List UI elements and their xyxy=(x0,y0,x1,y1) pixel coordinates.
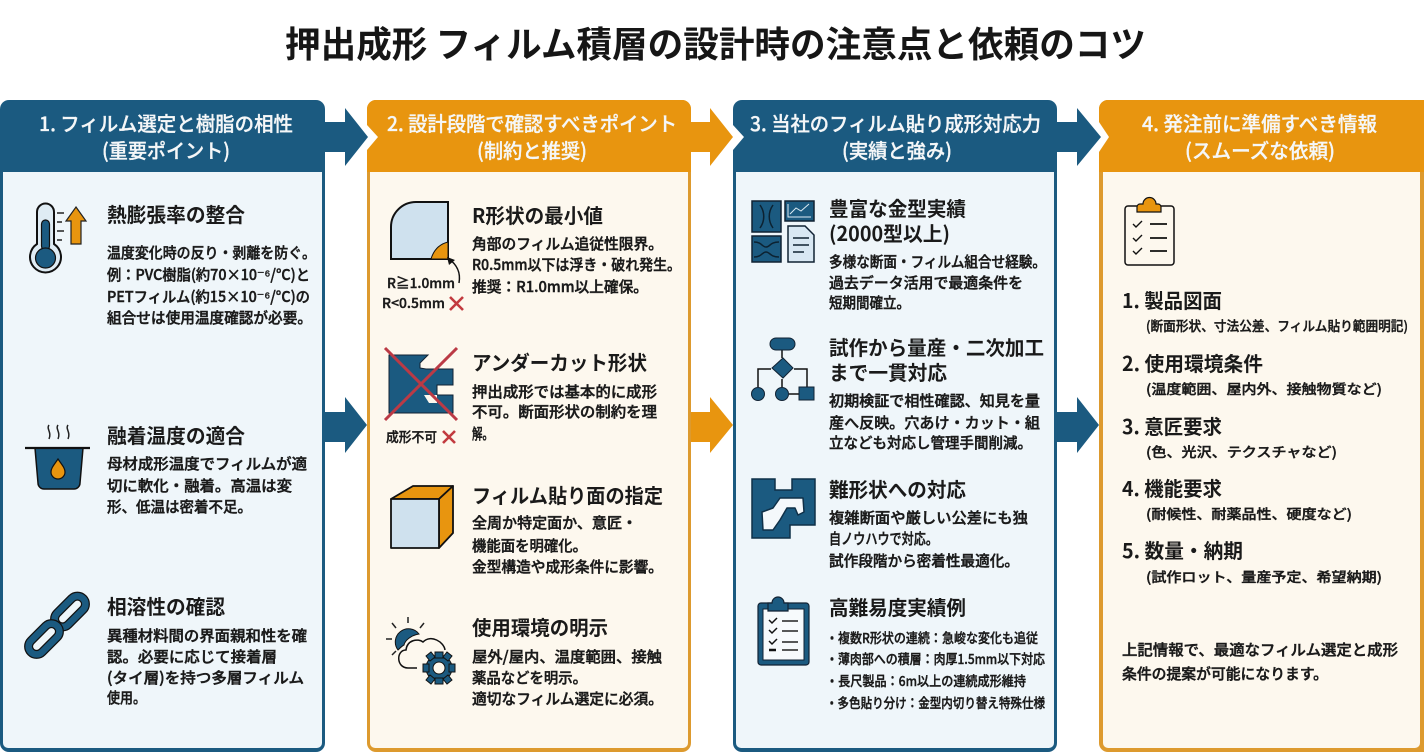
closing note: 条件の提案が可能になります。 xyxy=(1122,663,1328,684)
header: panel 2 xyxy=(387,108,677,164)
header: panel 2: (制約と推奨) xyxy=(477,135,587,164)
item: difficult shapes xyxy=(829,474,1028,571)
header: panel 3: 3. 当社のフィルム貼り成形対応力 xyxy=(750,108,1041,137)
item: 2 usage conditions xyxy=(1122,348,1382,398)
item: film surface: フィルム貼り面の指定 xyxy=(472,480,663,509)
item: film surface: 全周か特定面か、意匠・ xyxy=(472,512,637,533)
icon: thermometer with up arrow xyxy=(30,204,86,272)
item: usage environment: 適切なフィルム選定に必須。 xyxy=(472,688,663,709)
item: compatibility: 相溶性の確認 xyxy=(107,591,225,620)
item: difficult shapes: 自ノウハウで対応。 xyxy=(829,528,938,549)
icon: R corner shape xyxy=(382,202,463,312)
item: difficult shapes: 試作段階から密着性最適化。 xyxy=(829,550,1019,571)
item: difficult examples: ・多色貼り分け：金型内切り替え特殊仕様 xyxy=(826,692,1045,712)
item: compatibility: 異種材料間の界面親和性を確 xyxy=(107,625,307,646)
arrow: panel 2 to 3 top xyxy=(691,108,744,166)
panel: 3 company capability xyxy=(733,100,1057,752)
item: 4 functional requirements: (耐候性、耐薬品性、硬度など) xyxy=(1146,503,1352,523)
icon: undercut crossed out xyxy=(385,348,457,446)
header: panel 1 xyxy=(39,108,293,164)
icon: undercut crossed out: 成形不可 xyxy=(386,426,437,446)
item: usage environment xyxy=(472,612,663,709)
icon: R corner shape: R≧1.0mm xyxy=(387,272,455,292)
item: 5 quantity and delivery: (試作ロット、量産予定、希望納期) xyxy=(1146,566,1382,586)
arrow: panel 1 to 2 top xyxy=(325,108,378,166)
item: undercut: 解。 xyxy=(472,423,493,444)
panel: 2 design checkpoints xyxy=(367,100,691,752)
item: minimum R: 角部のフィルム追従性限界。 xyxy=(472,233,663,254)
item: 3 design requirements xyxy=(1122,411,1337,461)
item: fusion temperature xyxy=(107,420,307,517)
item: mold record: 豊富な金型実績 xyxy=(829,193,966,222)
item: difficult examples: ・薄肉部への積層：肉厚1.5mm以下対応 xyxy=(826,648,1045,668)
item: mold record: 多様な断面・フィルム組合せ経験。 xyxy=(829,251,1046,272)
item: compatibility: (タイ層)を持つ多層フィルム xyxy=(107,667,304,688)
item: usage environment: 薬品などを明示。 xyxy=(472,667,587,688)
item: difficult examples: ・複数R形状の連続：急峻な変化も追従 xyxy=(826,627,1038,647)
item: prototype to production: 試作から量産・二次加工 xyxy=(829,332,1044,361)
item: mold record: 過去データ活用で最適条件を xyxy=(829,272,1023,293)
title: 押出成形 フィルム積層の設計時の注意点と依頼のコツ xyxy=(285,16,1146,68)
panel: 1 film selection xyxy=(0,100,325,752)
item: prototype to production: 立なども対応し管理手間削減。 xyxy=(829,432,1032,453)
arrow: panel 3 to 4 top xyxy=(1057,108,1109,166)
panel: 4 information to prepare xyxy=(1099,100,1424,752)
item: thermal expansion: 熱膨張率の整合 xyxy=(107,199,245,228)
icon: cube xyxy=(391,486,453,548)
arrow: panel 2 to 3 bottom xyxy=(691,397,733,453)
item: prototype to production xyxy=(829,332,1044,453)
item: mold record xyxy=(829,193,1046,313)
item: prototype to production: 産へ反映。穴あけ・カット・組 xyxy=(829,412,1040,433)
icon: complex profile xyxy=(752,479,815,538)
item: 5 quantity and delivery xyxy=(1122,535,1382,586)
header: panel 3 xyxy=(750,108,1041,164)
item: film surface: 機能面を明確化。 xyxy=(472,535,587,556)
icon: sun cloud gear xyxy=(386,617,455,684)
item: fusion temperature: 母材成形温度でフィルムが適 xyxy=(107,453,307,474)
item: difficult shapes: 難形状への対応 xyxy=(829,474,966,503)
item: thermal expansion: PETフィルム(約15×10⁻⁶/°C)の xyxy=(107,286,310,307)
header: panel 3: (実績と強み) xyxy=(842,135,952,164)
item: minimum R: 推奨：R1.0mm以上確保。 xyxy=(472,276,648,297)
icon: chain link xyxy=(25,593,89,658)
item: thermal expansion: 例：PVC樹脂(約70×10⁻⁶/°C)と xyxy=(107,264,310,285)
icon: mold drawings and document xyxy=(752,201,814,262)
closing note: 上記情報で、最適なフィルム選定と成形 xyxy=(1122,639,1398,660)
item: difficult shapes: 複雑断面や厳しい公差にも独 xyxy=(829,507,1028,528)
item: fusion temperature: 切に軟化・融着。高温は変 xyxy=(107,475,292,496)
arrow: panel 1 to 2 bottom xyxy=(325,397,367,453)
icon: melting cup xyxy=(25,425,90,489)
item: 4 functional requirements xyxy=(1122,473,1352,523)
item: thermal expansion xyxy=(107,199,316,328)
item: mold record: 短期間確立。 xyxy=(829,292,910,313)
item: usage environment: 使用環境の明示 xyxy=(472,612,608,641)
item: compatibility: 使用。 xyxy=(107,687,146,708)
item: compatibility xyxy=(107,591,307,708)
item: 3 design requirements: 3. 意匠要求 xyxy=(1122,411,1222,440)
item: minimum R xyxy=(472,200,681,297)
item: 2 usage conditions: (温度範囲、屋内外、接触物質など) xyxy=(1146,378,1382,398)
header: panel 4: 4. 発注前に準備すべき情報 xyxy=(1142,108,1377,137)
item: thermal expansion: 組合せは使用温度確認が必要。 xyxy=(107,307,312,328)
item: undercut: 不可。断面形状の制約を理 xyxy=(472,401,657,422)
item: prototype to production: まで一貫対応 xyxy=(829,357,947,386)
item: film surface xyxy=(472,480,663,577)
item: 1 product drawing: (断面形状、寸法公差、フィルム貼り範囲明記) xyxy=(1146,315,1408,335)
item: difficult examples xyxy=(826,592,1045,712)
item: 2 usage conditions: 2. 使用環境条件 xyxy=(1122,348,1263,377)
item: undercut: アンダーカット形状 xyxy=(472,347,647,376)
header: panel 1: (重要ポイント) xyxy=(102,135,230,164)
header: panel 4: (スムーズな依頼) xyxy=(1185,135,1335,164)
item: 3 design requirements: (色、光沢、テクスチャなど) xyxy=(1146,441,1337,461)
item: difficult examples: ・長尺製品：6m以上の連続成形維持 xyxy=(826,670,1026,690)
item: mold record: (2000型以上) xyxy=(829,218,950,247)
icon: clipboard checklist navy xyxy=(758,597,809,665)
item: minimum R: R形状の最小値 xyxy=(472,200,603,229)
item: prototype to production: 初期検証で相性確認、知見を量 xyxy=(829,390,1040,411)
item: difficult examples: 高難易度実績例 xyxy=(829,592,966,621)
item: usage environment: 屋外/屋内、温度範囲、接触 xyxy=(472,646,662,667)
item: fusion temperature: 融着温度の適合 xyxy=(107,420,245,449)
item: thermal expansion: 温度変化時の反り・剥離を防ぐ。 xyxy=(107,242,316,263)
item: undercut xyxy=(472,347,657,444)
item: minimum R: R0.5mm以下は浮き・破れ発生。 xyxy=(472,254,681,275)
item: film surface: 金型構造や成形条件に影響。 xyxy=(472,556,663,577)
item: fusion temperature: 形、低温は密着不足。 xyxy=(107,496,252,517)
closing note xyxy=(1122,639,1398,684)
icon: R corner shape: R<0.5mm xyxy=(382,292,445,312)
item: 1 product drawing: 1. 製品図面 xyxy=(1122,285,1222,314)
icon: clipboard checklist orange xyxy=(1125,198,1174,265)
item: undercut: 押出成形では基本的に成形 xyxy=(472,381,657,402)
header: panel 1: 1. フィルム選定と樹脂の相性 xyxy=(39,108,293,137)
item: compatibility: 認。必要に応じて接着層 xyxy=(107,646,277,667)
header: panel 4 xyxy=(1142,108,1377,164)
arrow: panel 3 to 4 bottom xyxy=(1057,397,1099,453)
header: panel 2: 2. 設計段階で確認すべきポイント xyxy=(387,108,677,137)
item: 1 product drawing xyxy=(1122,285,1408,335)
item: 4 functional requirements: 4. 機能要求 xyxy=(1122,473,1222,502)
item: 5 quantity and delivery: 5. 数量・納期 xyxy=(1122,535,1243,564)
icon: flowchart xyxy=(752,338,814,400)
